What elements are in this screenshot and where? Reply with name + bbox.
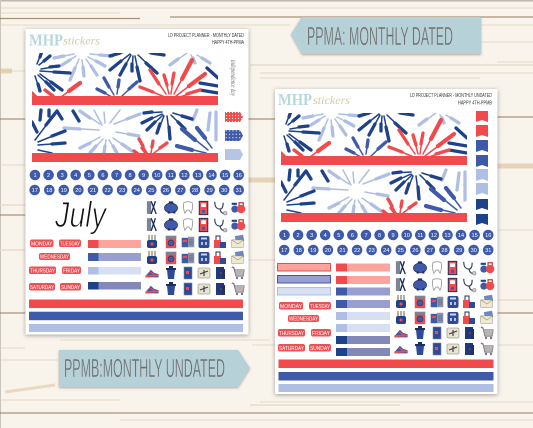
number circles: 8 — [378, 233, 381, 239]
label: PPMB monthly undated — [59, 350, 250, 387]
date circles: 13 — [195, 173, 201, 179]
sheet title — [410, 93, 493, 106]
date circles: 8 — [129, 173, 132, 179]
number circles: 2 — [297, 233, 300, 239]
number circles: 13 — [444, 233, 451, 239]
number circles: 31 — [485, 248, 491, 254]
number circles: 1 — [283, 233, 286, 239]
number circles — [279, 230, 494, 255]
number circles: 28 — [441, 248, 448, 254]
long washi strips — [29, 300, 243, 332]
weekday labels: TUESDAY — [310, 304, 330, 310]
sheet title: HAPPY 4TH-PPMB — [458, 100, 493, 106]
logo — [278, 90, 350, 109]
date circles: 21 — [90, 188, 96, 194]
date circles: 3 — [61, 173, 64, 179]
number circles: 7 — [364, 233, 368, 239]
logo — [29, 30, 100, 50]
date circles: 18 — [46, 188, 52, 194]
number circles: 6 — [351, 233, 354, 239]
sheet title: LD PROJECT PLANNER - MONTHLY DATED — [168, 33, 244, 39]
weekday labels: TUESDAY — [60, 241, 80, 247]
number circles: 12 — [431, 233, 437, 239]
date circles: 24 — [134, 188, 140, 194]
date circles: 25 — [148, 188, 154, 194]
date circles: 14 — [208, 173, 215, 179]
weekday labels — [278, 302, 331, 352]
weekday labels: THURSDAY — [279, 331, 304, 337]
weekday labels: WEDNESDAY — [40, 254, 69, 260]
logo: stickers — [63, 34, 100, 48]
date circles — [29, 170, 244, 195]
date circles: 15 — [222, 173, 228, 179]
sheet title: LD PROJECT PLANNER - MONTHLY UNDATED — [410, 93, 492, 99]
date circles: 5 — [88, 173, 91, 179]
number circles: 20 — [325, 248, 331, 254]
weekday labels: SUNDAY — [310, 346, 330, 352]
weekday labels: THURSDAY — [30, 268, 55, 274]
date circles: 12 — [181, 173, 188, 179]
weekday labels: FRIDAY — [312, 331, 330, 337]
number circles: 9 — [392, 233, 395, 239]
weekday labels: MONDAY — [280, 304, 302, 310]
date circles: 10 — [154, 173, 160, 179]
weekday labels: SATURDAY — [279, 346, 304, 352]
number circles: 23 — [368, 248, 375, 254]
number circles: 26 — [412, 248, 419, 254]
number circles: 24 — [383, 248, 389, 254]
date circles: 20 — [75, 188, 82, 194]
panel: undated sticker sheet — [275, 89, 498, 394]
weekday labels: MONDAY — [31, 241, 53, 247]
sheet title: HAPPY 4TH-PPMA — [212, 40, 244, 46]
date circles: 28 — [192, 188, 198, 194]
icon stickers grid — [394, 261, 494, 355]
header bars — [88, 240, 141, 290]
number circles: 4 — [324, 233, 327, 239]
number circles: 3 — [310, 233, 313, 239]
number circles: 16 — [485, 233, 491, 239]
date circles: 26 — [163, 188, 169, 194]
date circles: 30 — [221, 188, 227, 194]
number circles: 25 — [398, 248, 404, 254]
tag stickers — [225, 112, 243, 160]
icon stickers grid — [145, 201, 245, 295]
label: PPMA monthly dated — [291, 17, 481, 54]
label: PPMB monthly undated: PPMB:MONTHLY UNDATED — [64, 353, 225, 383]
logo: stickers — [313, 93, 350, 107]
date circles: 4 — [74, 173, 77, 179]
panel: dated sticker sheet — [26, 29, 248, 334]
number circles: 11 — [417, 233, 423, 239]
sheet title — [168, 33, 244, 46]
date circles: 16 — [236, 173, 242, 179]
date circles: 11 — [168, 173, 174, 179]
date circles: 23 — [119, 188, 125, 194]
date circles: 22 — [104, 188, 111, 194]
vertical script text: independence day — [229, 60, 237, 97]
date circles: 31 — [236, 188, 242, 194]
date circles: 19 — [61, 188, 67, 194]
weekday labels: WEDNESDAY — [289, 316, 318, 322]
weekday labels: SATURDAY — [30, 285, 54, 291]
date circles: 6 — [101, 173, 104, 179]
date circles: 9 — [142, 173, 145, 179]
date circles: 29 — [206, 188, 213, 194]
logo: MHP — [29, 30, 63, 50]
number circles: 5 — [337, 233, 340, 239]
number circles: 30 — [471, 248, 477, 254]
date circles: 27 — [177, 188, 184, 194]
number circles: 22 — [354, 248, 360, 254]
date circles: 1 — [33, 173, 37, 179]
number circles: 15 — [471, 233, 478, 239]
number circles: 17 — [281, 248, 287, 254]
weekday labels: FRIDAY — [63, 268, 80, 274]
number circles: 10 — [404, 233, 410, 239]
date circles: 2 — [47, 173, 50, 179]
weekday labels — [29, 240, 81, 291]
number circles: 27 — [427, 248, 433, 254]
flag stickers — [476, 111, 488, 225]
long washi strips — [278, 360, 494, 392]
date circles: 7 — [115, 173, 118, 179]
fireworks banners — [32, 51, 218, 162]
number circles: 29 — [456, 248, 462, 254]
number circles: 19 — [310, 248, 316, 254]
outlined boxes — [278, 264, 330, 295]
number circles: 14 — [458, 233, 464, 239]
date circles: 17 — [32, 188, 38, 194]
month script: July: July — [54, 194, 108, 235]
weekday labels: SUNDAY — [61, 285, 80, 291]
fireworks banners — [281, 111, 467, 222]
number circles: 21 — [339, 248, 346, 254]
logo: MHP — [278, 90, 312, 109]
number circles: 18 — [296, 248, 302, 254]
header bars — [336, 264, 390, 356]
